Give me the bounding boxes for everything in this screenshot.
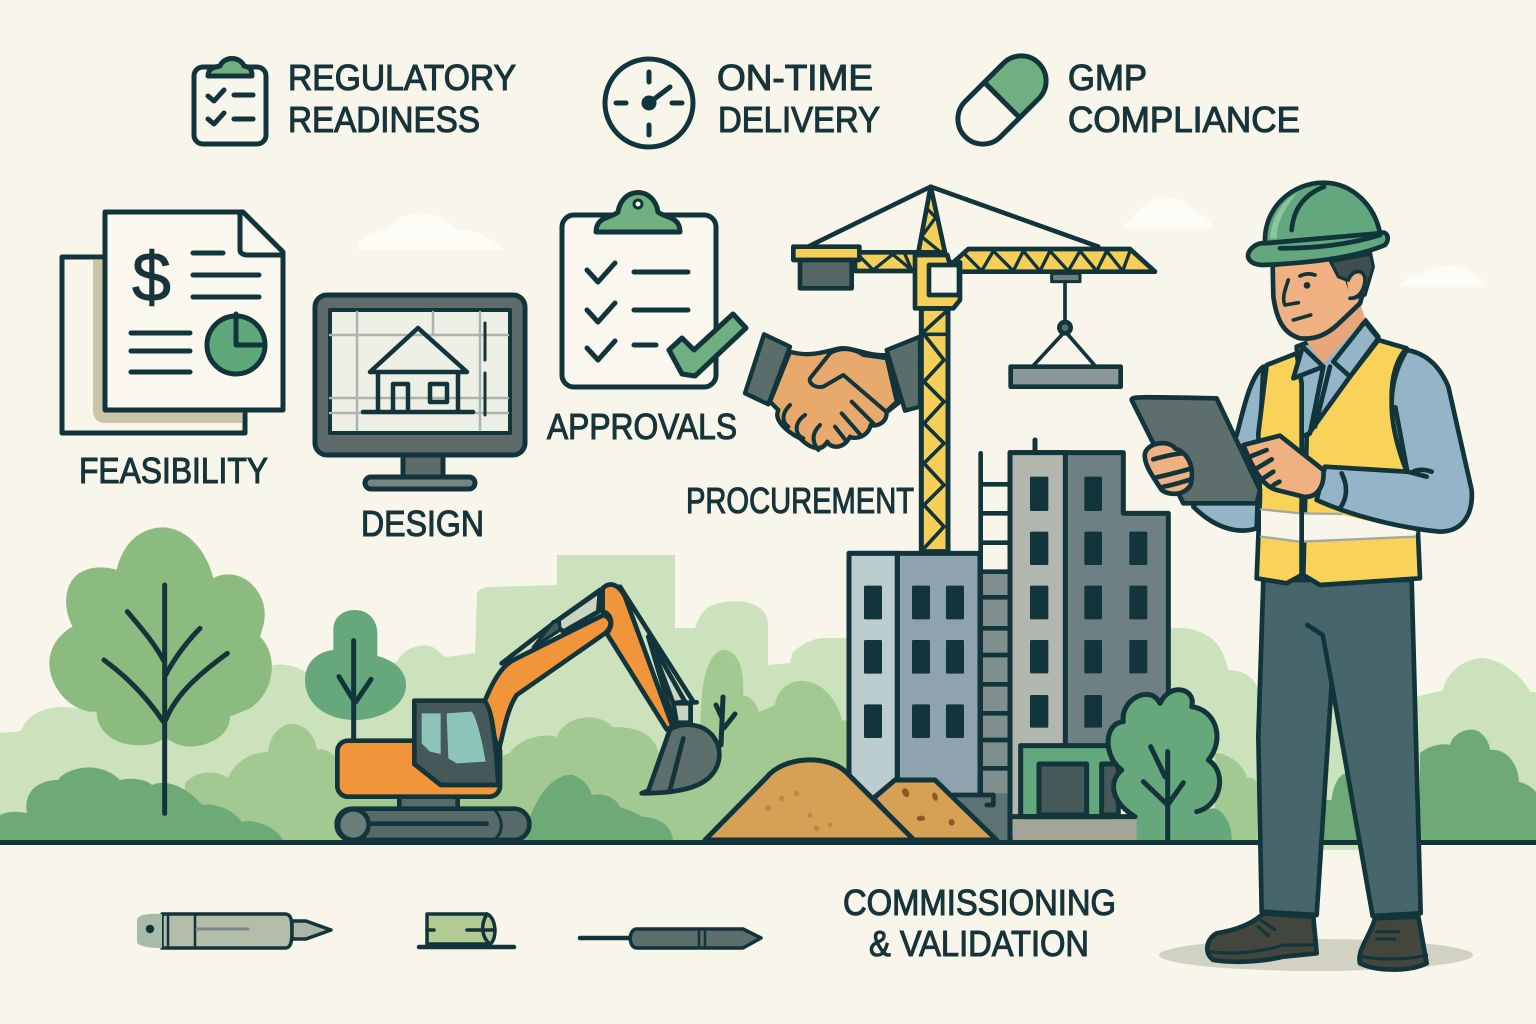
clouds xyxy=(357,197,1487,287)
right building xyxy=(1010,440,1168,839)
crane mast xyxy=(921,308,948,552)
left building xyxy=(849,553,1010,840)
right cuff xyxy=(887,337,920,411)
excavator boom and arm xyxy=(485,585,697,752)
handshake xyxy=(745,334,920,450)
crane slewing unit xyxy=(915,255,960,308)
sand pile small xyxy=(873,780,997,840)
collar xyxy=(1293,322,1378,433)
tree by building xyxy=(1108,690,1232,840)
vest xyxy=(1257,340,1420,585)
label: regulatory readiness: REGULATORY xyxy=(288,57,516,98)
label: commissioning and validation: & VALIDATION xyxy=(869,923,1089,964)
icon: feasibility document xyxy=(62,212,283,433)
icon: approvals clipboard xyxy=(562,192,746,387)
badge: on-time delivery xyxy=(605,57,880,147)
shirt xyxy=(1297,320,1378,437)
icon: clock xyxy=(605,59,693,147)
excavator bucket xyxy=(642,725,719,793)
tool: green block xyxy=(419,914,514,947)
worker xyxy=(1132,183,1472,585)
icon: small clipboard xyxy=(194,58,266,144)
left boot xyxy=(1207,913,1317,962)
label: design: DESIGN xyxy=(361,503,484,544)
label: regulatory readiness xyxy=(288,57,516,140)
background: dark green foreground bushes xyxy=(0,730,1536,840)
crane xyxy=(793,187,1155,552)
excavator xyxy=(337,585,719,840)
badge: regulatory readiness xyxy=(194,57,516,144)
hands xyxy=(770,348,899,450)
scaffold xyxy=(981,453,1011,840)
crane top section xyxy=(918,187,945,252)
label: gmp compliance xyxy=(1068,57,1300,140)
right arm xyxy=(1317,350,1472,532)
crane hook and load xyxy=(1011,273,1121,387)
label: on-time delivery xyxy=(717,57,880,140)
entrance annex xyxy=(1013,746,1138,841)
right hand xyxy=(1243,436,1324,497)
right boot xyxy=(1359,917,1427,970)
label: regulatory readiness: READINESS xyxy=(288,99,480,140)
background: mid green bushes xyxy=(185,650,1257,840)
label: approvals: APPROVALS xyxy=(547,406,737,447)
sand pile large xyxy=(705,760,914,840)
badge: gmp compliance xyxy=(948,46,1300,154)
tool: stylus xyxy=(580,929,761,948)
ground line xyxy=(0,840,1536,845)
worker legs xyxy=(1207,580,1427,970)
label: procurement: PROCUREMENT xyxy=(686,480,914,521)
excavator cab xyxy=(414,701,498,785)
neck xyxy=(1307,303,1365,363)
label: on-time delivery: DELIVERY xyxy=(718,99,880,140)
left hand xyxy=(1145,443,1192,494)
label: commissioning and validation: COMMISSIONING xyxy=(843,882,1116,923)
gap between legs xyxy=(1317,680,1363,850)
helmet xyxy=(1248,183,1388,265)
excavator tracks xyxy=(337,797,529,840)
ground between legs xyxy=(1317,840,1360,845)
label: commissioning and validation xyxy=(843,882,1116,964)
buildings xyxy=(705,440,1232,841)
label: on-time delivery: ON-TIME xyxy=(717,57,873,98)
label: gmp compliance: COMPLIANCE xyxy=(1068,99,1300,140)
crane front jib xyxy=(953,249,1155,272)
icon: design monitor xyxy=(315,295,525,489)
distant sapling xyxy=(716,697,735,745)
crane tie lines xyxy=(810,187,1098,247)
crane counterweight xyxy=(793,247,859,288)
trousers xyxy=(1258,580,1421,916)
label: feasibility: FEASIBILITY xyxy=(79,450,268,491)
crane back jib xyxy=(855,252,917,271)
head xyxy=(1273,253,1373,339)
left cuff xyxy=(745,334,790,404)
tablet xyxy=(1132,397,1260,503)
icon: feasibility document: $ xyxy=(132,238,171,316)
background: light green skyline xyxy=(0,555,1536,840)
excavator body xyxy=(337,741,500,797)
tool: marker pen xyxy=(137,914,331,948)
label: gmp compliance: GMP xyxy=(1068,57,1147,98)
bush between legs xyxy=(1324,773,1358,840)
worker shadow xyxy=(1159,939,1473,971)
big tree xyxy=(49,527,272,813)
left sleeve xyxy=(1193,367,1263,531)
icon: capsule xyxy=(948,46,1056,154)
small tree xyxy=(305,610,406,747)
